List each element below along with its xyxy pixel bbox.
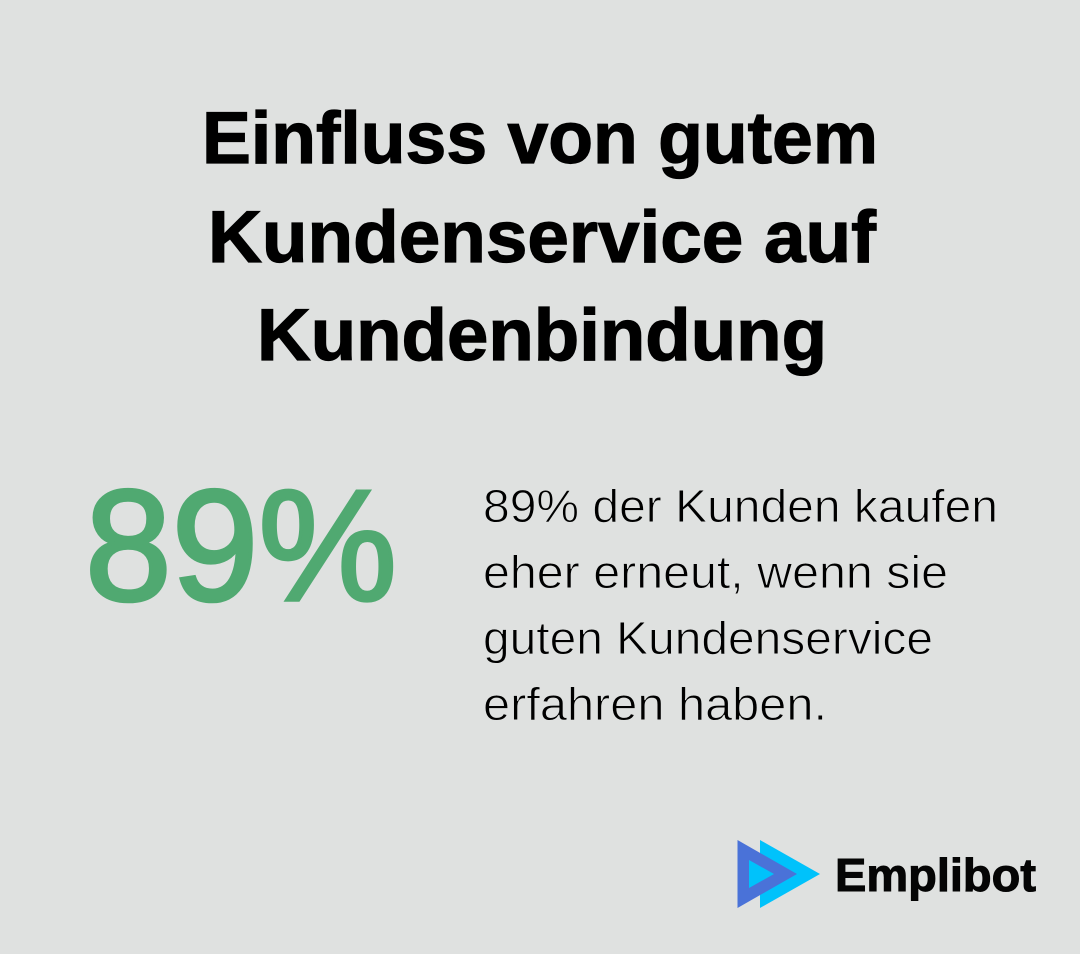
title: Einfluss von gutem: [202, 98, 878, 179]
title: Kundenservice auf: [208, 197, 877, 278]
title: Kundenbindung: [257, 295, 827, 376]
logo: Emplibot: [738, 840, 1036, 908]
statistic description: guten Kundenservice: [483, 612, 933, 664]
statistic description: [483, 480, 998, 730]
logo wordmark: Emplibot: [835, 849, 1036, 901]
icon: play triangles: [738, 840, 820, 908]
statistic description: erfahren haben.: [483, 678, 827, 730]
title: [202, 98, 878, 376]
statistic description: 89% der Kunden kaufen: [483, 480, 998, 532]
big statistic: 89%: 89%: [85, 458, 397, 634]
statistic description: eher erneut, wenn sie: [483, 546, 948, 598]
